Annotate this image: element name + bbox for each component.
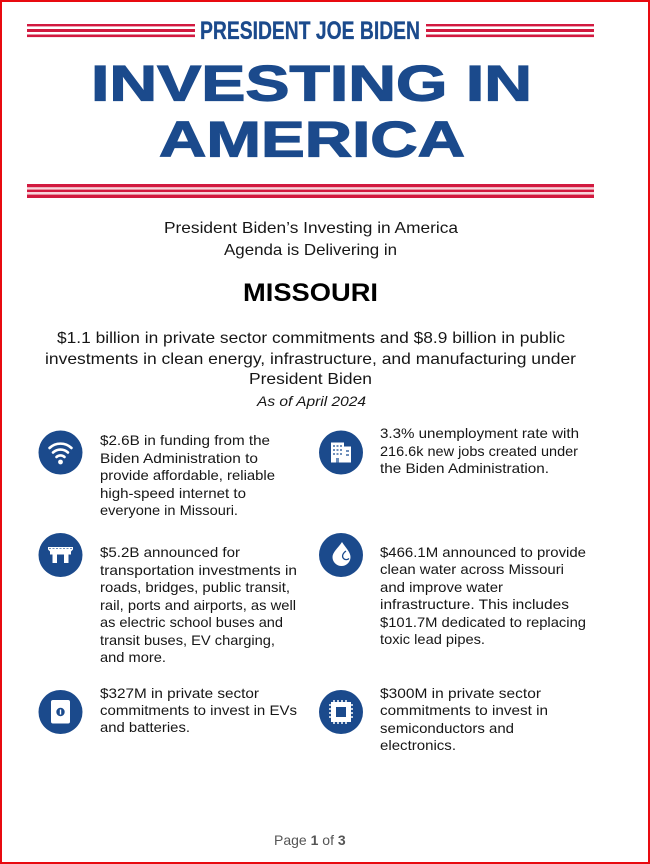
state heading: MISSOURI bbox=[243, 279, 378, 307]
date: As of April 2024 bbox=[256, 393, 366, 409]
text: semiconductors: $300M in private sector bbox=[380, 685, 541, 701]
text: unemployment: the Biden Administration. bbox=[380, 460, 549, 476]
header lower stripes bbox=[27, 184, 594, 198]
icon: chip bbox=[319, 690, 363, 734]
summary text: $1.1 billion in private sector commitments and $8.9 billion in public bbox=[57, 330, 565, 347]
title: INVESTING IN bbox=[91, 56, 532, 112]
text: EVs and batteries bbox=[100, 685, 297, 735]
text: internet funding: high-speed internet to bbox=[100, 485, 246, 501]
text: EVs and batteries: commitments to invest in EVs bbox=[100, 702, 297, 718]
text: transportation: rail, ports and airports, as well bbox=[100, 597, 296, 613]
text: clean water: clean water across Missouri bbox=[380, 561, 564, 577]
summary text: investments in clean energy, infrastructure, and manufacturing under bbox=[45, 351, 577, 368]
summary text: President Biden bbox=[249, 371, 372, 388]
text: semiconductors: electronics. bbox=[380, 737, 456, 753]
icon: buildings bbox=[319, 430, 363, 474]
intro text: Agenda is Delivering in bbox=[224, 242, 397, 259]
intro text bbox=[164, 220, 458, 259]
text: semiconductors: commitments to invest in bbox=[380, 702, 548, 718]
text: internet funding: everyone in Missouri. bbox=[100, 502, 238, 518]
header: president line: PRESIDENT JOE BIDEN bbox=[200, 17, 420, 45]
text: transportation: roads, bridges, public transit, bbox=[100, 579, 290, 595]
text: clean water: $466.1M announced to provide bbox=[380, 544, 586, 560]
icon: water drop bbox=[319, 533, 363, 577]
text: transportation: as electric school buses and bbox=[100, 614, 283, 630]
text: transportation: and more. bbox=[100, 649, 166, 665]
text: clean water: toxic lead pipes. bbox=[380, 631, 485, 647]
text: transportation bbox=[100, 544, 297, 665]
text: transportation: transportation investments in bbox=[100, 562, 297, 578]
text: internet funding: Biden Administration to bbox=[100, 450, 258, 466]
text: transportation: transit buses, EV charging, bbox=[100, 632, 275, 648]
page number: Page 1 of 3 bbox=[274, 832, 346, 848]
header: president line bbox=[27, 17, 594, 45]
text: internet funding: provide affordable, reliable bbox=[100, 467, 275, 483]
text: unemployment: 216.6k new jobs created under bbox=[380, 443, 578, 459]
text: transportation: $5.2B announced for bbox=[100, 544, 240, 560]
text: clean water: infrastructure. This includes bbox=[380, 596, 569, 612]
summary text bbox=[45, 330, 577, 388]
text: unemployment bbox=[380, 425, 579, 476]
icon: battery bbox=[38, 690, 82, 734]
text: EVs and batteries: and batteries. bbox=[100, 719, 190, 735]
icon: bridge bbox=[38, 533, 82, 577]
intro text: President Biden’s Investing in America bbox=[164, 220, 458, 237]
text: semiconductors: semiconductors and bbox=[380, 720, 514, 736]
text: unemployment: 3.3% unemployment rate with bbox=[380, 425, 579, 441]
text: internet funding bbox=[100, 432, 275, 518]
title: AMERICA bbox=[159, 112, 465, 168]
text: EVs and batteries: $327M in private sector bbox=[100, 685, 259, 701]
text: clean water: and improve water bbox=[380, 579, 503, 595]
text: internet funding: $2.6B in funding from the bbox=[100, 432, 270, 448]
text: clean water bbox=[380, 544, 586, 647]
text: semiconductors bbox=[380, 685, 548, 753]
icon: wifi bbox=[38, 430, 82, 474]
text: clean water: $101.7M dedicated to replacing bbox=[380, 614, 586, 630]
title bbox=[91, 56, 532, 168]
